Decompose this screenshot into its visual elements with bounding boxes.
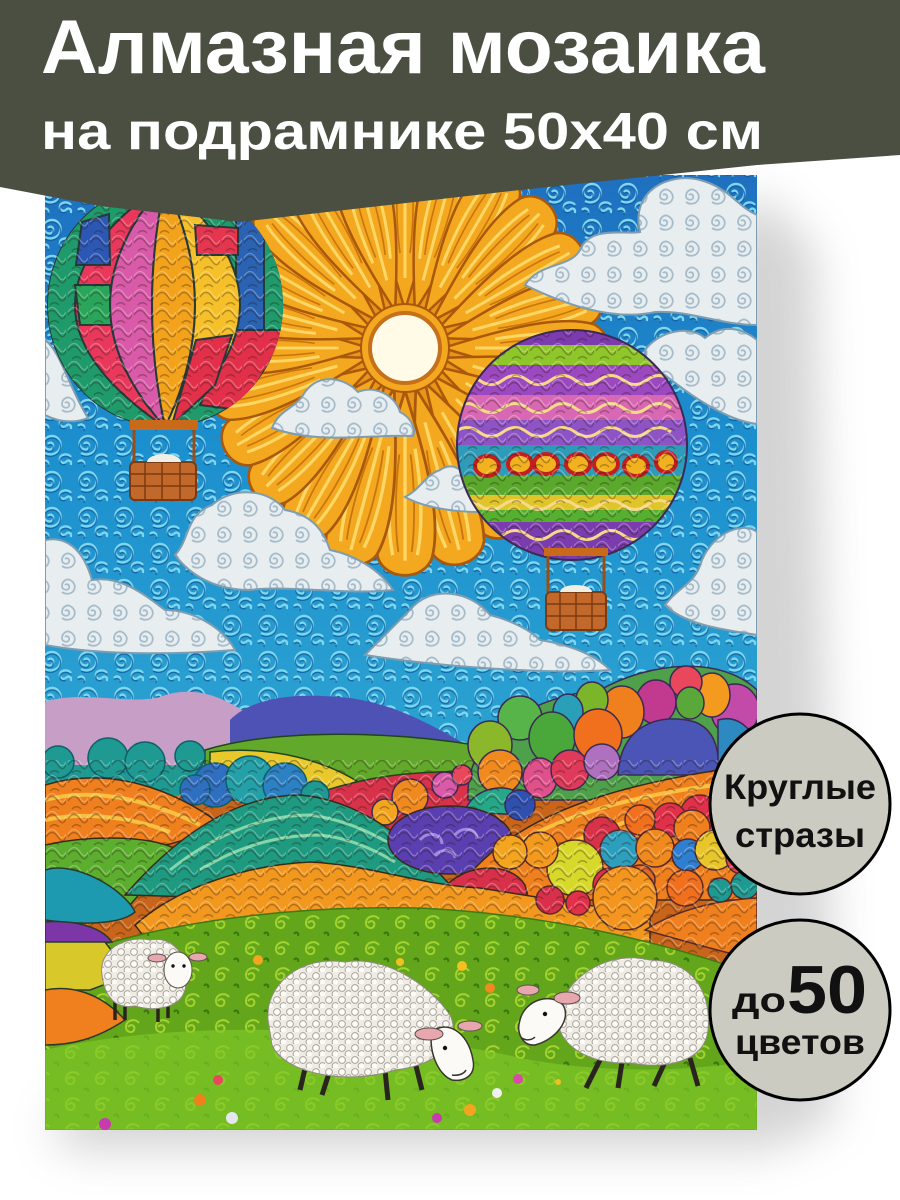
clouds <box>45 178 757 671</box>
sky <box>45 175 757 775</box>
sun <box>216 190 606 577</box>
meadow flowers <box>99 955 561 1130</box>
cloud: lower left <box>45 539 235 653</box>
cloud: mid left <box>175 492 393 591</box>
subtitle: на подрамнике 50х40 см <box>41 103 763 161</box>
badge: up to 50 colours: 50 <box>787 952 867 1028</box>
cloud: front of sun <box>272 379 414 438</box>
distant mountains <box>45 692 462 765</box>
hills texture <box>45 760 757 975</box>
badge: round rhinestones: Круглые <box>724 768 876 807</box>
header banner <box>0 0 900 222</box>
left fields <box>45 868 135 1045</box>
hills: back row <box>204 734 474 830</box>
cloud: right middle <box>645 329 757 424</box>
teal bushes left <box>42 738 329 809</box>
hot air balloon: left <box>47 183 290 500</box>
badge: up to 50 colours: до <box>732 981 786 1020</box>
badge: up to 50 colours: цветов <box>735 1023 865 1062</box>
badge: round rhinestones <box>710 714 890 894</box>
sheep: large right <box>517 958 708 1088</box>
cloud: far left top <box>45 340 88 421</box>
lower landscape base <box>45 795 728 962</box>
cloud: lower center <box>365 594 610 671</box>
balloon ropes and basket <box>544 548 608 630</box>
sheep: large centre <box>268 961 482 1100</box>
rainbow cluster right <box>493 795 759 960</box>
cloud: small by balloon <box>405 466 480 512</box>
title: Алмазная мозаика <box>41 5 766 90</box>
balloon ropes and basket <box>130 420 198 500</box>
colourful round bushes <box>372 666 759 825</box>
hot air balloon: right <box>455 330 690 630</box>
meadow <box>45 908 757 1130</box>
hills: middle row <box>45 764 757 950</box>
sheep: small left <box>102 939 207 1022</box>
canvas drop shadow <box>50 190 835 1150</box>
cloud: top right <box>525 178 757 325</box>
cloud: lower right <box>665 528 757 635</box>
panel: mosaic artwork <box>42 145 759 1130</box>
badge: round rhinestones: стразы <box>735 816 865 855</box>
badge: up to 50 colours <box>710 920 890 1100</box>
